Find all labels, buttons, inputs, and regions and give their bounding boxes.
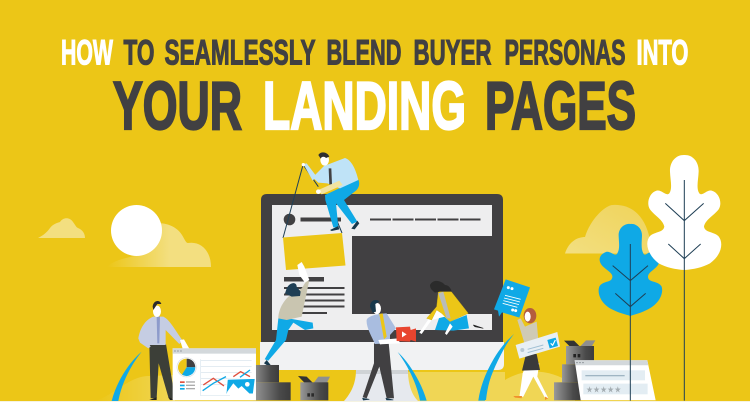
title line 1: INTO (636, 34, 688, 72)
title line 1 (61, 34, 688, 72)
large cloud behind sun (107, 223, 211, 267)
blue blade right (478, 338, 510, 401)
title line 2 (113, 68, 636, 144)
monitor frame (261, 194, 503, 342)
ground mounds (95, 372, 575, 401)
title line 1: SEAMLESSLY (164, 34, 316, 72)
logo bar (300, 218, 341, 222)
left blue blade (112, 352, 142, 401)
pie chart (177, 358, 196, 377)
title line 2: YOUR (113, 68, 242, 144)
screen (272, 205, 492, 330)
person on top of monitor (302, 152, 359, 231)
climbing person (264, 262, 313, 365)
boxes left (252, 365, 291, 400)
star rating: ★★★★★ (586, 385, 622, 395)
yellow hoisted block (283, 165, 346, 270)
title line 1: PERSONAS (504, 34, 626, 72)
blue blade centre (398, 352, 427, 401)
text lines (284, 277, 344, 314)
image card (226, 378, 255, 394)
line chart (201, 359, 252, 396)
chart card (173, 348, 256, 400)
white leaf tree (647, 155, 721, 401)
logo dot (284, 214, 295, 225)
monitor stand (344, 370, 418, 401)
title line 1: HOW (61, 34, 113, 72)
rating card (575, 360, 656, 400)
woman with cards (494, 279, 560, 400)
title line 1: BUYER (414, 34, 492, 72)
check card (516, 332, 560, 359)
standing man (138, 301, 189, 400)
title line 1: BLEND (326, 34, 402, 72)
right blue blade lower (480, 334, 514, 400)
monitor (260, 194, 504, 401)
monitor chin (260, 342, 504, 370)
title line 2: LANDING (263, 68, 466, 144)
hero panel (352, 236, 492, 314)
speech card (494, 279, 530, 318)
legend (180, 381, 195, 390)
title line 1: TO (124, 34, 154, 72)
nav dashes (370, 218, 480, 220)
boxes right (554, 340, 595, 400)
title line 2: PAGES (485, 68, 636, 144)
right cloud (565, 205, 650, 254)
presenting person (363, 300, 416, 400)
open box (298, 376, 330, 400)
sun (111, 205, 162, 256)
icon: video camera (396, 327, 416, 342)
blue leaf tree (599, 224, 662, 401)
seated woman (419, 281, 483, 335)
small cloud (38, 218, 85, 238)
